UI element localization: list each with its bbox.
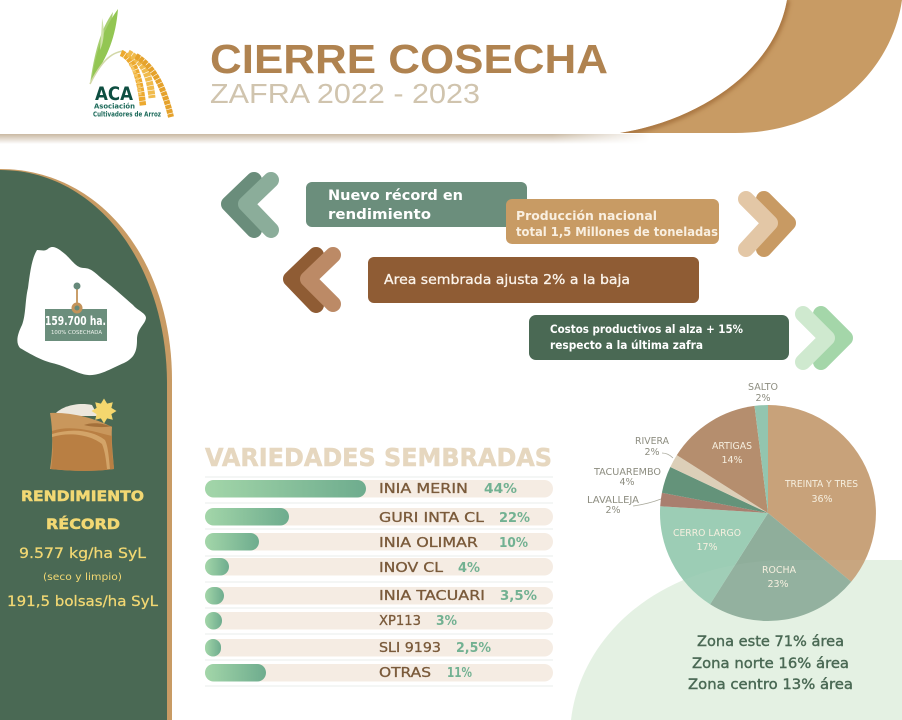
value: Cerro Largo: 17% (696, 542, 718, 553)
row: XP113: 3% (436, 614, 457, 629)
row: OTRAS (205, 664, 553, 682)
yield note: (seco y limpio) (43, 572, 122, 583)
leader line: Lavalleja (633, 499, 661, 506)
value: Rivera: 2% (644, 447, 660, 458)
row: OTRAS: 11% (447, 666, 472, 681)
panel: zone background (571, 560, 902, 720)
arrow: left brown (291, 255, 333, 305)
icon: rice sack with star (50, 398, 116, 471)
area label box (45, 309, 107, 341)
callout: nuevo record (306, 182, 527, 227)
row: INOV CL: INOV CL (379, 561, 444, 576)
icon: rice leaves (90, 9, 124, 84)
label: Rivera: RIVERA (635, 436, 669, 447)
subtitle: ZAFRA 2022 - 2023 (210, 78, 480, 109)
heading: variedades sembradas: VARIEDADES SEMBRADAS (205, 443, 552, 472)
callout: costos productivos (529, 315, 789, 360)
yield heading line 2: RÉCORD (46, 516, 120, 533)
slice: Tacuarembo (662, 467, 768, 513)
text block: zone shares: Zona centro 13% área (688, 677, 853, 693)
value: Lavalleja: 2% (605, 505, 621, 516)
row: INIA TACUARI: INIA TACUARI (379, 589, 485, 604)
row: SLI 9193: 2,5% (456, 641, 491, 656)
label: Salto: SALTO (748, 382, 778, 393)
callout: nuevo record: Nuevo récord en (328, 188, 463, 204)
callout: costos productivos: Costos productivos al alza + 15% (550, 322, 743, 336)
area value: 159.700 ha. (45, 314, 106, 328)
title: CIERRE COSECHA (210, 36, 608, 82)
arrow: right light green (803, 314, 845, 362)
label: Tacuarembo: TACUAREMBO (593, 467, 661, 478)
row: INIA OLIMAR: INIA OLIMAR (379, 536, 478, 551)
label: Treinta y Tres: TREINTA Y TRES (784, 479, 858, 490)
callout: produccion nacional: Producción nacional (516, 209, 657, 223)
text block: zone shares (688, 634, 853, 693)
arrow: right tan (746, 199, 788, 249)
row: INIA MERIN: INIA MERIN (379, 482, 468, 497)
row: OTRAS: OTRAS (379, 666, 431, 681)
map of Uruguay with total area (17, 247, 146, 375)
slice: Rocha (710, 513, 851, 621)
value: Treinta y Tres: 36% (811, 494, 833, 505)
area caption: 100% COSECHADA (51, 330, 103, 336)
yield bags per ha: 191,5 bolsas/ha SyL (7, 594, 158, 610)
label: Artigas: ARTIGAS (712, 441, 752, 452)
logo name line 1: Asociación (94, 102, 135, 110)
logo acronym: ACA (95, 83, 133, 105)
logo: ACA (90, 9, 171, 118)
callout: nuevo record: rendimiento (328, 207, 431, 223)
slice: Artigas (677, 406, 768, 513)
zone tint over pie (571, 560, 902, 720)
text block: zone shares: Zona norte 16% área (692, 656, 849, 672)
panel: rendimiento sidebar (0, 169, 172, 720)
row: INIA OLIMAR (205, 533, 553, 551)
callout: produccion nacional: total 1,5 Millones de toneladas (516, 225, 718, 239)
text block: zone shares: Zona este 71% área (697, 634, 844, 650)
pie chart: area por departamento (588, 383, 876, 621)
row: INIA TACUARI (205, 587, 553, 604)
callout: area sembrada: Area sembrada ajusta 2% a la baja (384, 272, 630, 288)
header accent swoosh (620, 0, 902, 134)
row: XP113 (205, 612, 553, 630)
yield heading line 1: RENDIMIENTO (21, 489, 144, 505)
label: Rocha: ROCHA (762, 565, 796, 576)
row: GURI INTA CL (205, 508, 553, 526)
row: GURI INTA CL: GURI INTA CL (379, 511, 485, 526)
row: SLI 9193 (205, 639, 553, 656)
row: INIA MERIN (205, 480, 553, 498)
slice: Lavalleja (660, 493, 768, 513)
leader line: Rivera (662, 453, 673, 458)
label: Cerro Largo: CERRO LARGO (673, 528, 741, 539)
row: INOV CL: 4% (458, 561, 480, 576)
row: SLI 9193: SLI 9193 (379, 641, 441, 656)
row: XP113: XP113 (379, 614, 421, 629)
callout: produccion nacional (506, 199, 719, 244)
value: Rocha: 23% (767, 579, 789, 590)
slice: Treinta y Tres (768, 405, 876, 582)
slice: Rivera (670, 455, 768, 513)
icon: rice grains (121, 53, 171, 117)
row: INIA MERIN: 44% (484, 482, 517, 497)
arrow: left green (229, 180, 271, 230)
label: Lavalleja: LAVALLEJA (587, 495, 640, 506)
row: INIA OLIMAR: 10% (499, 536, 528, 551)
logo name line 2: Cultivadores de Arroz (93, 110, 161, 118)
row: GURI INTA CL: 22% (499, 511, 530, 526)
slice: Cerro Largo (660, 506, 768, 604)
header shadow (0, 134, 641, 143)
yield kg per ha: 9.577 kg/ha SyL (19, 546, 146, 562)
row: INOV CL (205, 558, 553, 576)
value: Salto: 2% (755, 393, 771, 404)
callout: area sembrada (368, 257, 699, 303)
map pin (72, 282, 82, 314)
value: Artigas: 14% (721, 455, 743, 466)
value: Tacuarembo: 4% (619, 477, 635, 488)
bar chart: variedades (205, 477, 553, 686)
row: INIA TACUARI: 3,5% (500, 589, 537, 604)
slice: Salto (754, 405, 768, 513)
callout: costos productivos: respecto a la última zafra (550, 338, 703, 352)
